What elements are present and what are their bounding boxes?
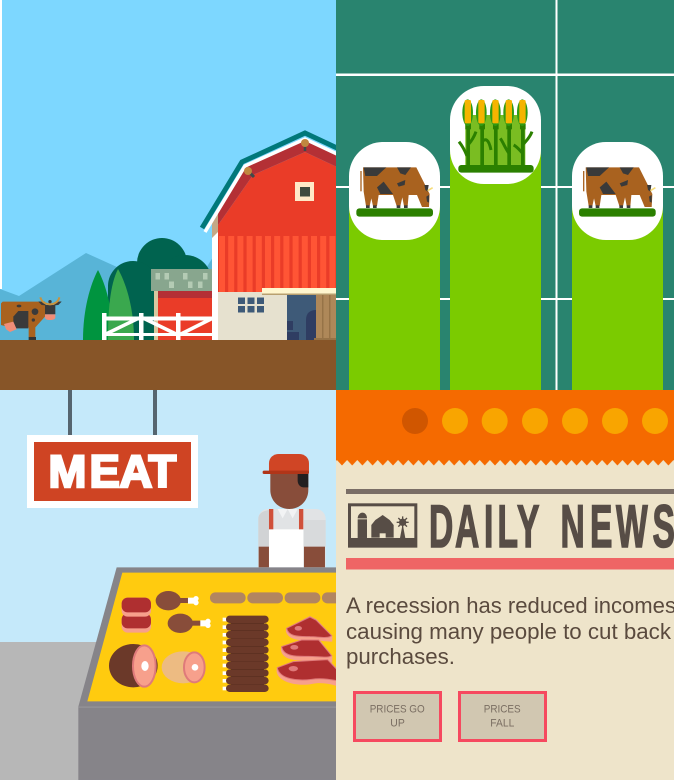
sign poles: [68, 390, 157, 436]
panel: daily news: [336, 390, 674, 780]
big barn: [202, 133, 337, 340]
button: prices go up: UP: [390, 717, 405, 729]
bar: cattle left: [349, 190, 440, 390]
panel: crop and livestock chart: [336, 0, 674, 390]
bar: cattle right: [572, 190, 663, 390]
butcher: [258, 454, 326, 567]
fence: [102, 313, 213, 340]
barn wall and windows: [218, 292, 288, 340]
floor: [0, 642, 336, 780]
button: prices fall: PRICES: [484, 704, 521, 716]
meat: ribs: [223, 616, 269, 692]
grid lines: [336, 0, 674, 390]
panel: farm scene: [0, 0, 337, 390]
roof knobs: [244, 139, 309, 177]
button: prices fall: FALL: [490, 717, 514, 729]
masthead title: DAILY NEWS: [429, 494, 674, 561]
masthead rule: [346, 489, 674, 494]
orange header: [336, 390, 674, 466]
trees: [83, 238, 212, 340]
badge: cow left: [349, 142, 440, 240]
sign: MEAT: MEAT: [48, 446, 176, 497]
meat: large ham: [109, 644, 158, 687]
display counter: [78, 567, 342, 780]
red rule: [346, 558, 674, 570]
panel: butcher shop: [0, 390, 342, 780]
button: prices go up: [354, 692, 440, 740]
small barn: [151, 269, 213, 340]
body text: [346, 593, 674, 669]
ground: [0, 340, 337, 390]
meat: small ham: [162, 651, 205, 683]
badge: corn: [450, 86, 541, 184]
loft window: [295, 182, 314, 201]
button: prices fall: [460, 692, 546, 740]
progress dots: [402, 408, 668, 434]
sign: MEAT: [27, 435, 198, 508]
barn door: [262, 288, 337, 340]
meat: stacked steaks: [122, 598, 151, 633]
bar: corn: [450, 135, 541, 390]
meat: sausages: [210, 592, 342, 603]
meat: cuts of steak: [277, 616, 337, 686]
icon: walking cow: [1, 297, 62, 340]
meat: drumsticks: [156, 591, 211, 633]
button: prices go up: PRICES GO: [370, 704, 425, 716]
icon: farm logo: [348, 503, 417, 548]
body text: purchases.: [346, 644, 455, 669]
badge: cow right: [572, 142, 663, 240]
body text: A recession has reduced incomes: [346, 593, 674, 618]
body text: causing many people to cut back: [346, 619, 672, 644]
mountains: [0, 253, 213, 340]
barn planks: [219, 236, 335, 292]
